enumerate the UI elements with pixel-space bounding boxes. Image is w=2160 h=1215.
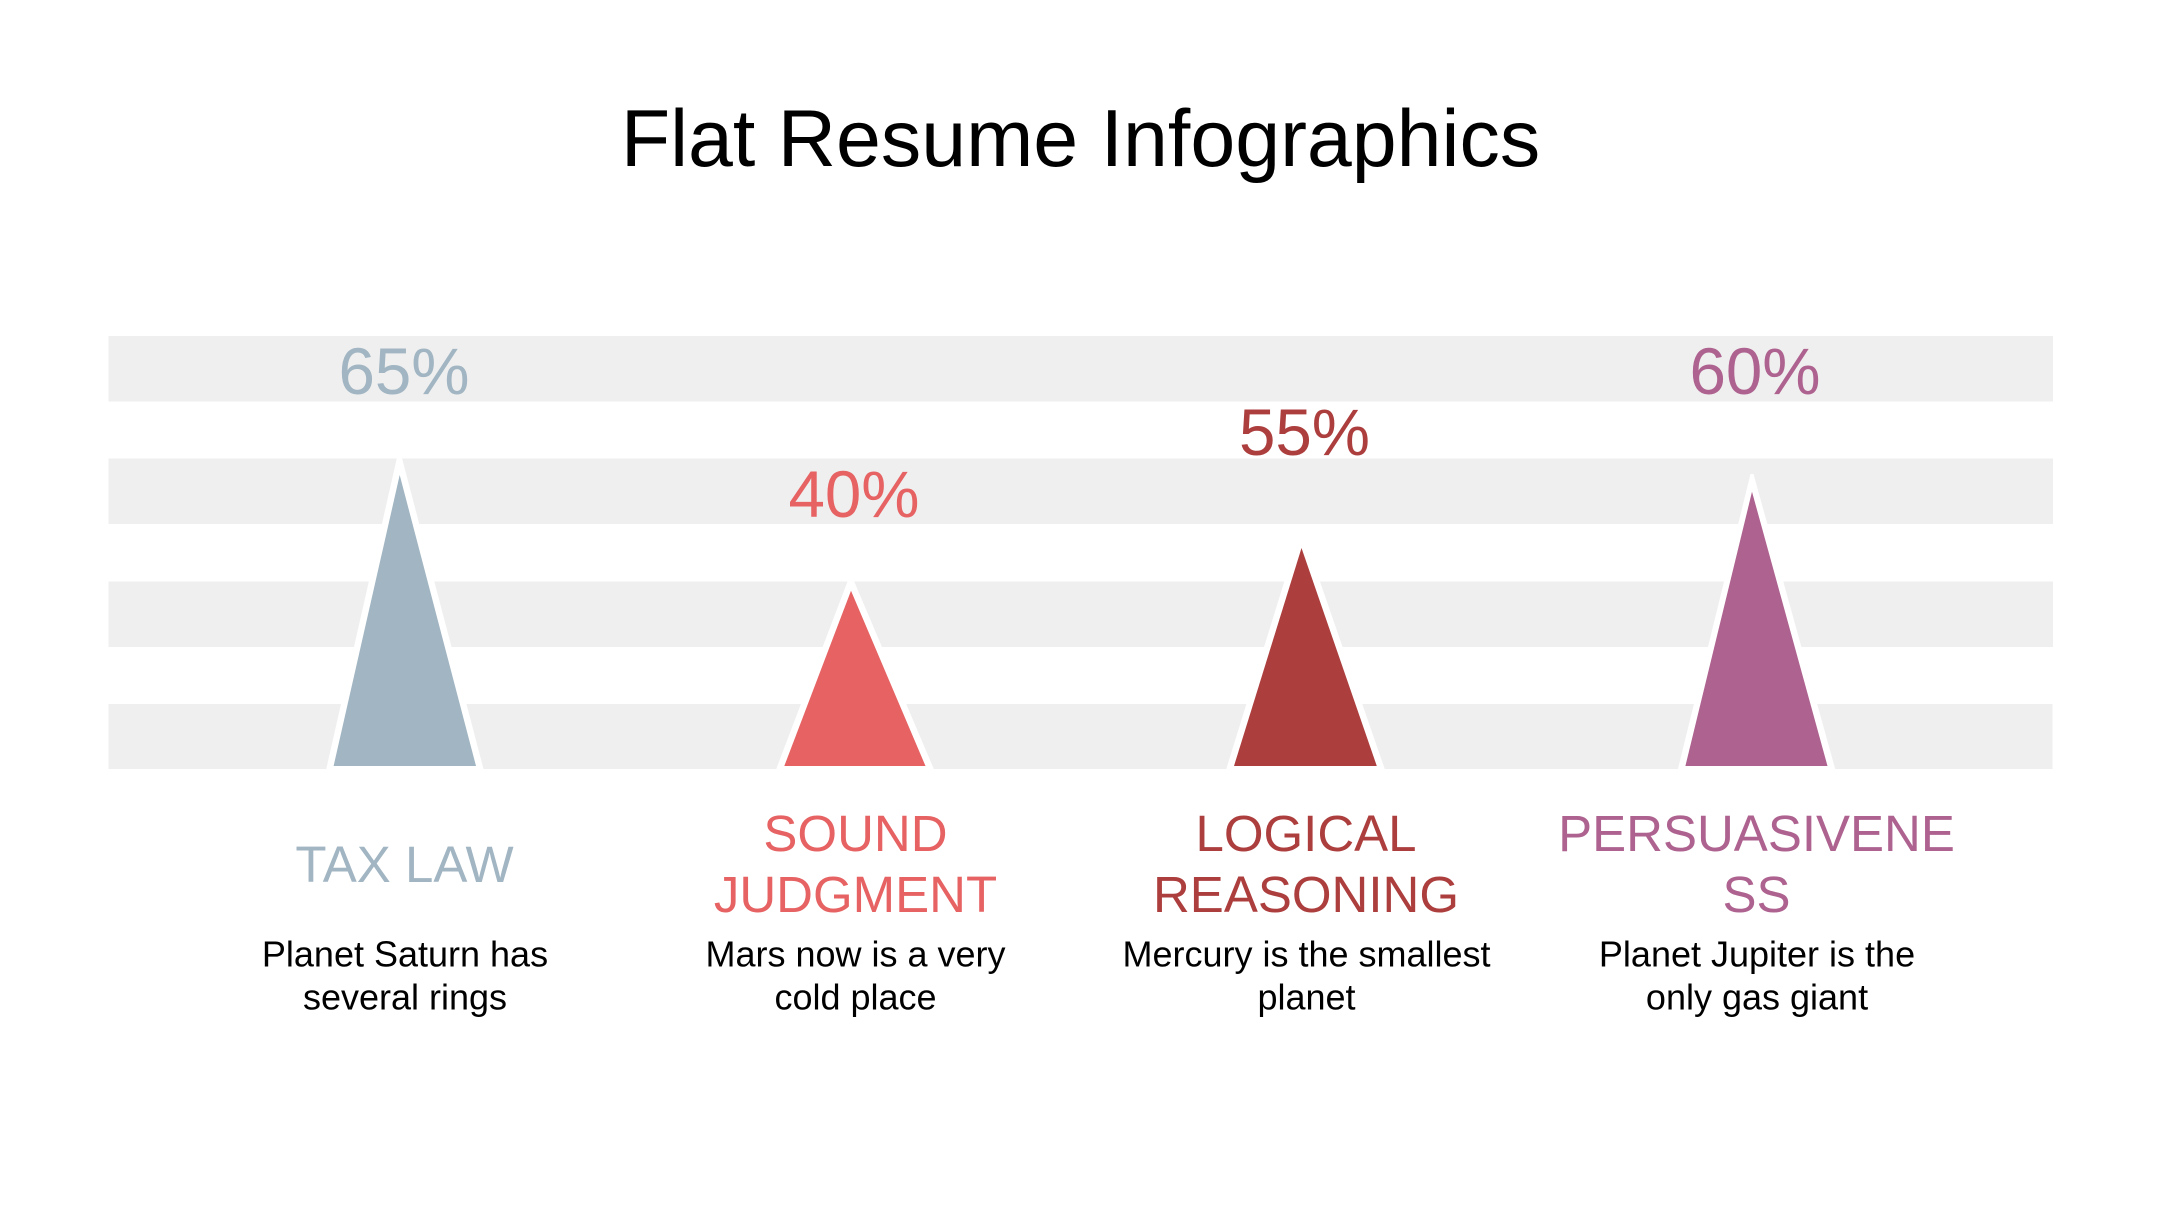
heading: sound judgment: JUDGMENT — [714, 866, 997, 923]
percentage: 55%: 55% — [1239, 396, 1370, 469]
triangle: sound judgment 40% — [784, 591, 926, 766]
percentage: 40%: 40% — [788, 458, 920, 531]
column: persuasiveness — [1558, 335, 1955, 1018]
triangle: logical reasoning 55% — [1234, 548, 1377, 766]
description: logical reasoning: Mercury is the smallest — [1122, 934, 1491, 974]
column: tax law — [262, 335, 548, 1018]
description: persuasiveness: only gas giant — [1646, 976, 1868, 1018]
description: persuasiveness: Planet Jupiter is the — [1599, 934, 1915, 974]
description: logical reasoning: planet — [1257, 976, 1356, 1018]
triangle: tax law 65% — [334, 475, 476, 766]
percentage: 65%: 65% — [338, 335, 470, 408]
description: tax law: Planet Saturn has — [262, 934, 548, 974]
description: tax law: several rings — [303, 976, 507, 1018]
heading: sound judgment: SOUND — [763, 805, 948, 862]
triangle: persuasiveness 60% — [1677, 474, 1836, 772]
percentage: 60%: 60% — [1689, 335, 1821, 408]
description: sound judgment: Mars now is a very — [705, 934, 1006, 974]
heading: tax law: TAX LAW — [295, 836, 514, 893]
background bands — [108, 336, 2053, 769]
title: Flat Resume Infographics — [621, 94, 1540, 184]
description: sound judgment: cold place — [774, 976, 937, 1018]
heading: persuasiveness: PERSUASIVENE — [1558, 805, 1955, 862]
column: logical reasoning — [1122, 396, 1491, 1018]
heading: logical reasoning: REASONING — [1153, 866, 1459, 923]
heading: persuasiveness: SS — [1722, 866, 1791, 923]
column: sound judgment — [705, 458, 1006, 1018]
heading: logical reasoning: LOGICAL — [1195, 805, 1417, 862]
